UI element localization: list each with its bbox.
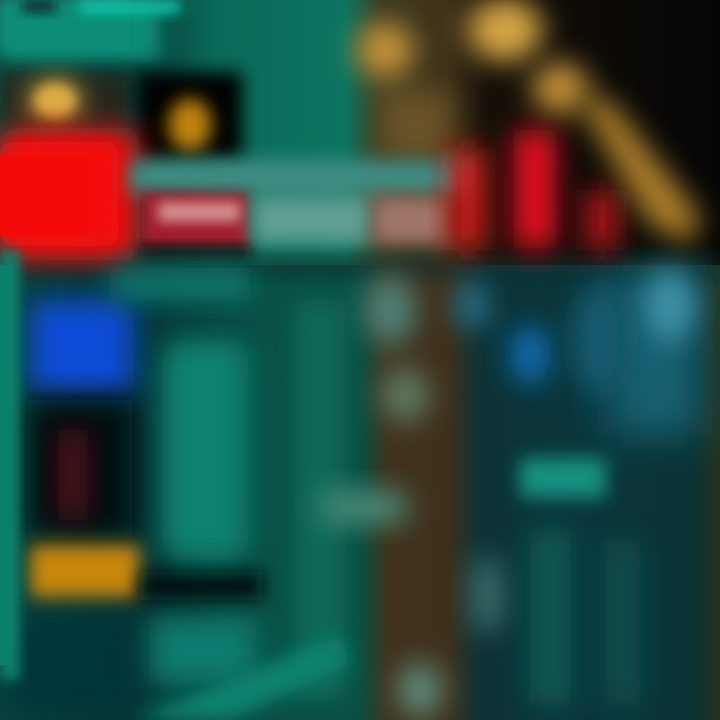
sign band (130, 160, 470, 259)
orange sign (30, 545, 140, 597)
dark panel with maroon stripe (28, 400, 132, 538)
ceiling lights (356, 0, 700, 245)
red block (0, 128, 140, 260)
blue sign (30, 268, 250, 394)
teal sign right (520, 458, 606, 498)
black strip (140, 572, 262, 600)
grey-teal patches centre (322, 274, 503, 718)
dark box with amber lamp (138, 72, 242, 162)
left edge strip (0, 250, 20, 680)
teal awning top left (0, 0, 180, 62)
teal column (130, 340, 350, 720)
blue lights right (455, 269, 694, 395)
lamp left under awning (0, 72, 130, 124)
red neon bars right (450, 130, 618, 250)
